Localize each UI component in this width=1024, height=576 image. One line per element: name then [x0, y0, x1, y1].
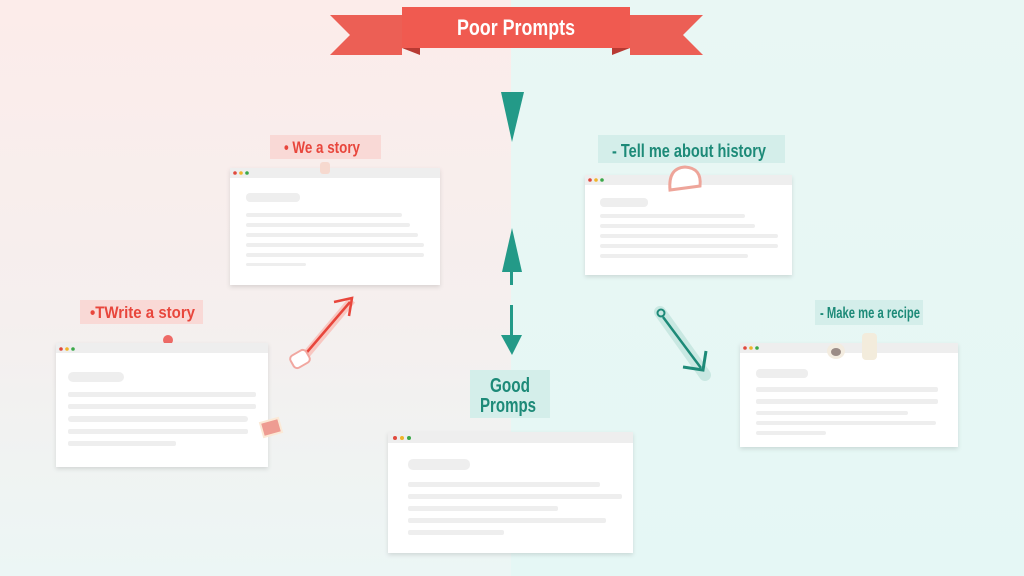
window: bottom center — [388, 432, 633, 553]
arrow: down triangle top — [501, 92, 524, 142]
window: top right — [585, 175, 792, 275]
label: We a story: • We a story — [284, 138, 360, 157]
icon: pink tag sticker — [670, 167, 700, 190]
label: We a story — [270, 135, 381, 159]
window: middle left — [56, 343, 268, 467]
arrow: up triangle — [502, 228, 522, 285]
label: TWrite a story: •TWrite a story — [90, 303, 195, 322]
window: top left — [230, 168, 440, 285]
label: Good Promps: Promps — [480, 395, 536, 417]
arrow: down to good prompts — [501, 305, 522, 355]
label: Tell me about history: - Tell me about history — [612, 141, 766, 161]
icon: eraser sticker — [260, 418, 282, 437]
title banner: Poor Prompts — [457, 15, 575, 40]
icon: red pin — [163, 335, 173, 345]
icon: small sticker top left — [320, 162, 330, 174]
label: Tell me about history — [598, 135, 785, 163]
icon: recipe stickers — [827, 333, 877, 360]
window: right — [740, 343, 958, 447]
arrow: red diagonal — [289, 298, 352, 370]
label: Make me a recipe: - Make me a recipe — [820, 305, 920, 322]
label: Good Promps — [470, 370, 550, 418]
title banner — [330, 7, 703, 55]
label: Make me a recipe — [815, 300, 923, 325]
arrow: teal diagonal — [658, 310, 706, 375]
label: Good Promps: Good — [490, 375, 530, 397]
